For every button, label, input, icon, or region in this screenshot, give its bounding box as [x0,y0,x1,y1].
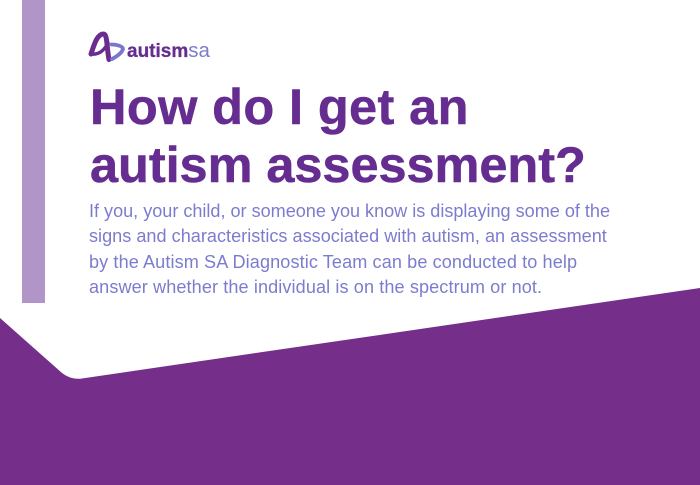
title: How do I get an [90,78,469,135]
icon: logo mark [88,32,125,62]
intro paragraph: answer whether the individual is on the spectrum or not. [89,277,542,297]
intro paragraph: If you, your child, or someone you know is displaying some of the [89,201,610,221]
intro paragraph: signs and characteristics associated with autism, an assessment [89,226,607,246]
intro paragraph [89,201,610,297]
logo [88,32,210,62]
title: autism assessment? [90,136,586,193]
intro paragraph: by the Autism SA Diagnostic Team can be conducted to help [89,252,577,272]
title [90,78,586,193]
decorative vertical bar [22,0,45,303]
logo wordmark: autismsa [127,38,210,62]
